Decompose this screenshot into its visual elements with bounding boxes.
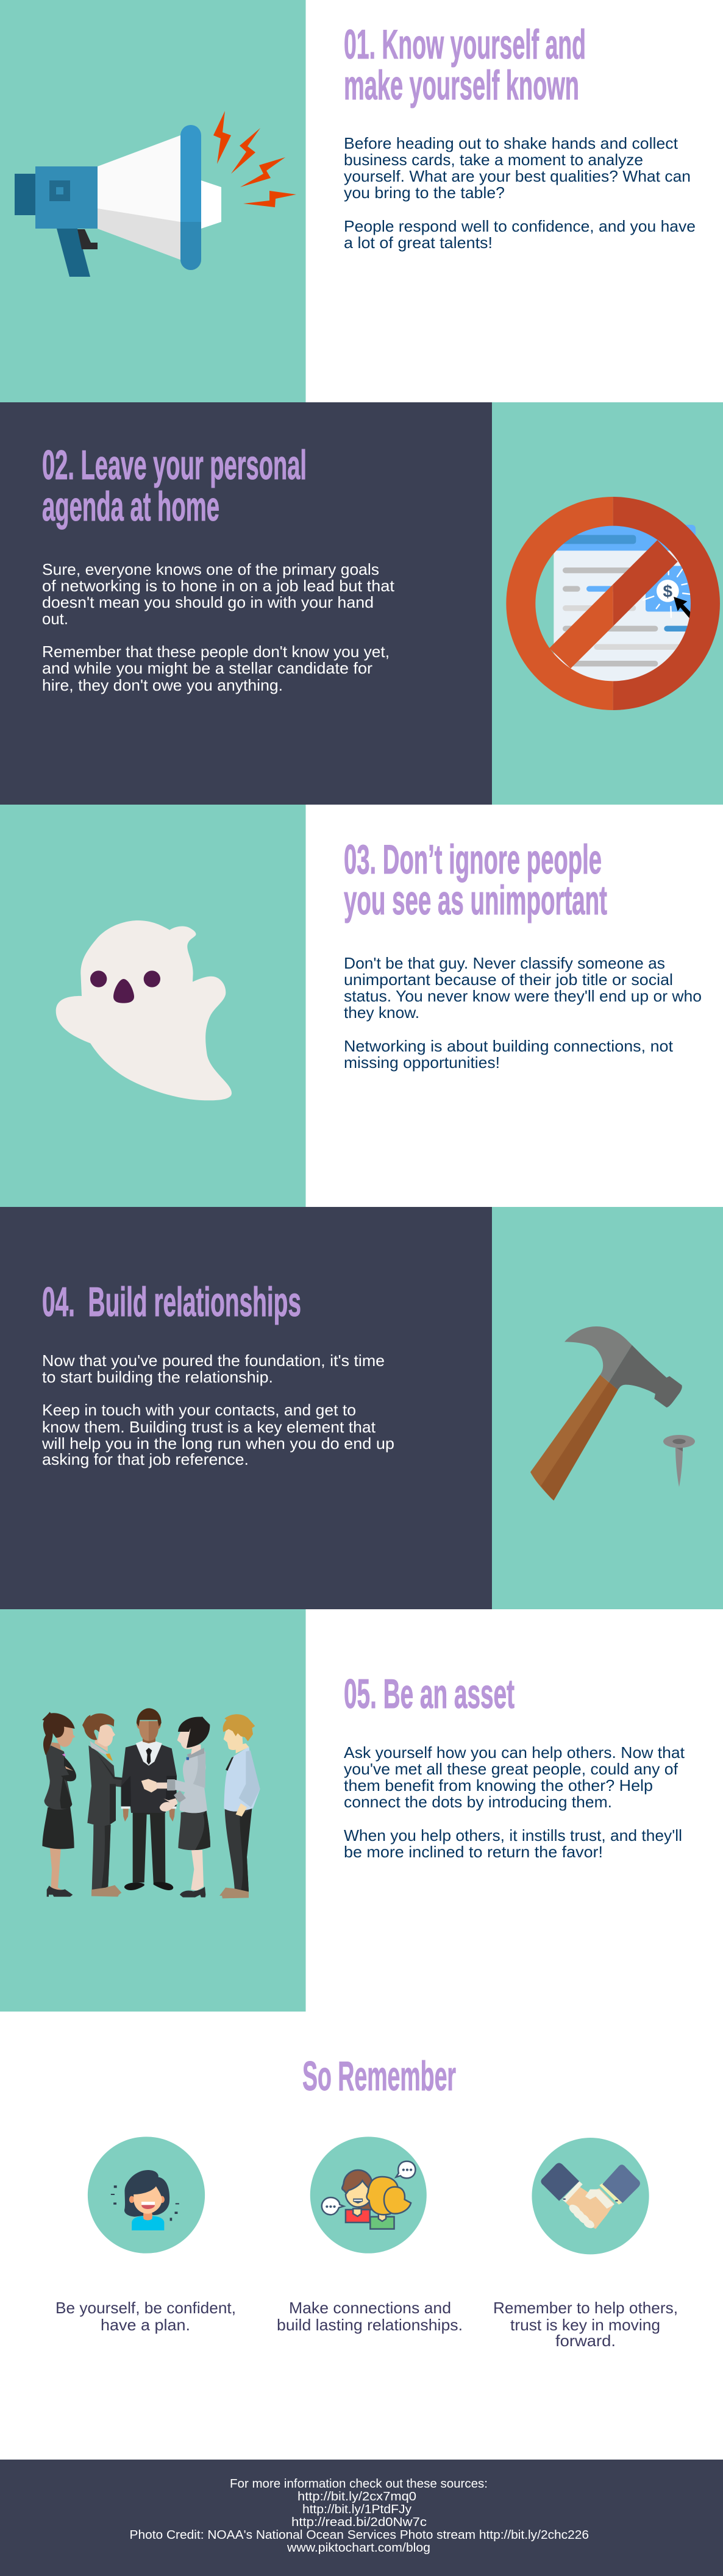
body text 03: Don't be that guy. Never classify someone as <box>344 954 665 972</box>
shaking hands <box>141 1779 157 1793</box>
body text 04: asking for that job reference. <box>42 1450 249 1468</box>
panel: footer sources <box>0 2460 723 2576</box>
dark background panel 02 <box>0 402 492 805</box>
icon: teal circle with handshake <box>532 2138 649 2254</box>
footer sources text: http://bit.ly/2cx7mq0 <box>297 2490 416 2503</box>
body text 05 <box>344 1743 685 1861</box>
body text 05: When you help others, it instills trust, and they'll <box>344 1826 682 1845</box>
body text 03: they know. <box>344 1003 419 1022</box>
person: man in grey suit <box>82 1713 142 1897</box>
body text 04: Now that you've poured the foundation, it's time <box>42 1351 385 1370</box>
body text 01: yourself. What are your best qualities? What can <box>344 167 691 185</box>
body text 02: and while you might be a stellar candidate for <box>42 659 372 677</box>
panel: 02 leave your personal agenda <box>0 402 723 805</box>
text: make connections <box>277 2299 463 2334</box>
icon: prohibited web page with dollar button: $ <box>663 582 673 600</box>
body text 05: Ask yourself how you can help others. Now that <box>344 1743 685 1762</box>
teal background panel 01 <box>0 0 306 402</box>
text: be yourself: Be yourself, be confident, <box>55 2299 236 2317</box>
heading 02: agenda at home <box>42 483 219 530</box>
body text 02: Remember that these people don't know you yet, <box>42 642 390 661</box>
body text 01: a lot of great talents! <box>344 233 493 252</box>
text: make connections: build lasting relationships. <box>277 2316 463 2334</box>
body text 05: you've met all these great people, could any of <box>344 1760 678 1778</box>
footer background <box>0 2460 723 2576</box>
text: remember to help others: forward. <box>555 2332 616 2350</box>
footer sources text: http://read.bi/2d0Nw7c <box>291 2516 427 2529</box>
text: remember to help others: Remember to help others, <box>493 2299 678 2317</box>
body text 01 <box>344 134 696 252</box>
icon: business people shaking hands <box>42 1708 260 1898</box>
text: remember to help others <box>493 2299 678 2350</box>
text: make connections: Make connections and <box>289 2299 451 2317</box>
body text 03 <box>344 954 702 1072</box>
heading 05: 05. Be an asset <box>344 1671 515 1717</box>
teal side panel 04 <box>492 1207 723 1609</box>
body text 01: Before heading out to shake hands and collect <box>344 134 678 152</box>
teal side panel 02 <box>492 402 723 805</box>
dark background panel 04 <box>0 1207 492 1609</box>
heading 03 <box>344 836 607 923</box>
body text 01: business cards, take a moment to analyze <box>344 151 643 169</box>
body text 01: People respond well to confidence, and you have <box>344 217 696 235</box>
person: man in center <box>121 1708 177 1890</box>
text: remember to help others: trust is key in moving <box>510 2316 660 2334</box>
teal background panel 03 <box>0 805 306 1207</box>
panel: 03 do not ignore people <box>0 805 702 1207</box>
body text 02 <box>42 560 395 694</box>
heading 01 <box>344 21 586 109</box>
panel: 05 be an asset <box>0 1609 685 2012</box>
panel: 04 build relationships <box>0 1207 723 1609</box>
body text 04: will help you in the long run when you do end up <box>41 1434 394 1453</box>
footer sources text: http://bit.ly/1PtdFJy <box>302 2503 411 2516</box>
heading: so remember: So Remember <box>302 2053 456 2099</box>
body text 03: missing opportunities! <box>344 1053 500 1072</box>
panel: so remember <box>55 2053 678 2350</box>
body text 04: to start building the relationship. <box>42 1368 273 1386</box>
person: woman with crossed arms <box>42 1712 76 1897</box>
footer sources text: For more information check out these sources: <box>230 2477 488 2491</box>
person: woman in grey jacket <box>157 1717 210 1898</box>
icon: teal circle with two people talking <box>310 2137 427 2254</box>
icon: ghost <box>56 920 232 1100</box>
body text 02: out. <box>42 610 68 628</box>
body text 05: be more inclined to return the favor! <box>344 1843 603 1861</box>
footer sources text: www.piktochart.com/blog <box>287 2541 430 2555</box>
footer sources text <box>129 2477 589 2555</box>
body text 03: unimportant because of their job title or social <box>344 970 673 989</box>
icon: prohibited web page with dollar button <box>506 497 720 710</box>
heading 04: 04. Build relationships <box>42 1279 301 1325</box>
icon: megaphone <box>15 111 296 277</box>
icon: teal circle with smiling woman <box>88 2137 205 2254</box>
body text 02: Sure, everyone knows one of the primary goals <box>42 560 379 578</box>
heading 02: 02. Leave your personal <box>42 442 307 488</box>
panel: 01 know yourself <box>0 0 696 402</box>
prohibition ring <box>506 497 720 710</box>
body text 05: connect the dots by introducing them. <box>344 1793 612 1811</box>
text: be yourself: have a plan. <box>101 2316 190 2334</box>
body text 04 <box>41 1351 394 1468</box>
body text 05: them benefit from knowing the other? Help <box>344 1776 653 1795</box>
body text 02: doesn't mean you should go in with your hand <box>42 593 374 611</box>
footer sources text: Photo Credit: NOAA's National Ocean Services Photo stream http://bit.ly/2chc226 <box>129 2528 589 2542</box>
person: man in light blue shirt <box>219 1714 260 1898</box>
body text 04: Keep in touch with your contacts, and get to <box>42 1401 356 1419</box>
body text 02: of networking is to hone in on a job lead but that <box>42 577 395 595</box>
body text 02: hire, they don't owe you anything. <box>42 676 283 694</box>
teal background panel 05 <box>0 1609 306 2012</box>
body text 03: status. You never know were they'll end up or who <box>344 987 702 1005</box>
text: be yourself <box>55 2299 236 2334</box>
body text 03: Networking is about building connections, not <box>344 1037 674 1055</box>
heading 02 <box>42 442 307 530</box>
body text 01: you bring to the table? <box>344 183 505 202</box>
icon: hammer and nail <box>530 1326 695 1501</box>
body text 04: know them. Building trust is a key element that <box>42 1418 376 1436</box>
